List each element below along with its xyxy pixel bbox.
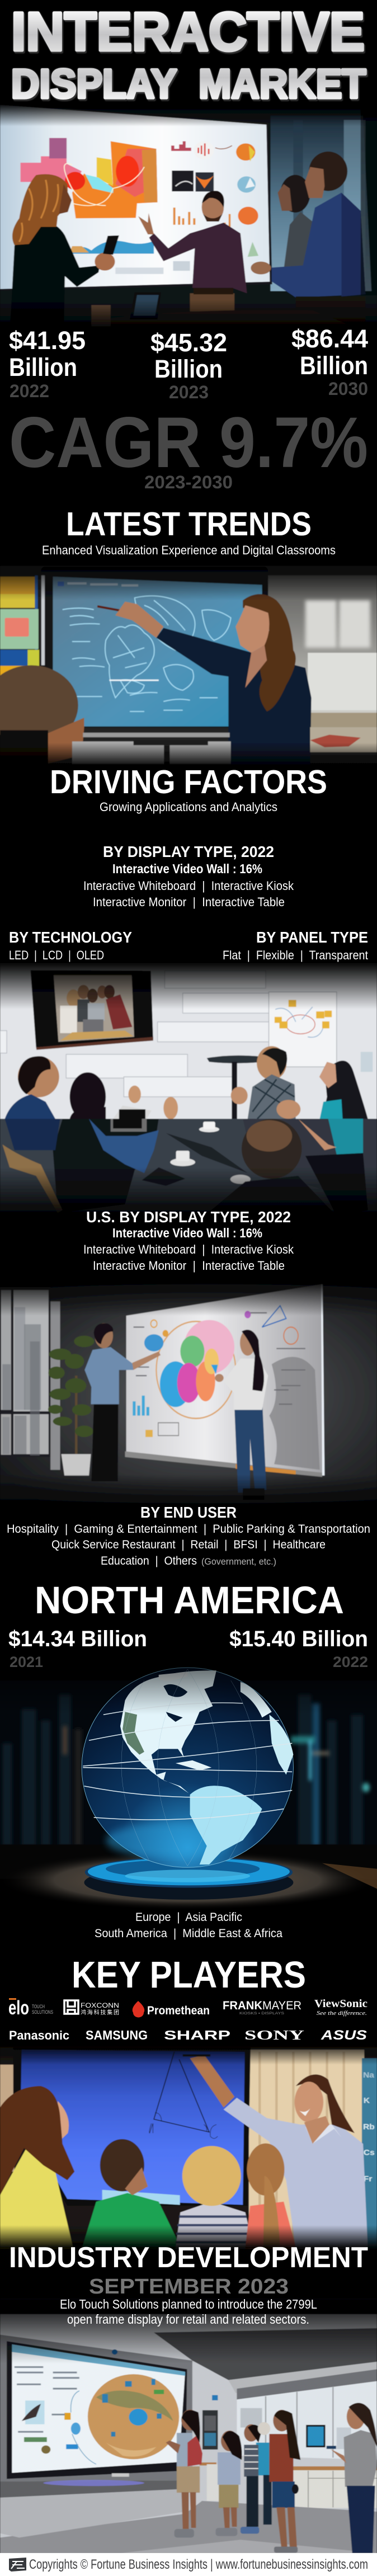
high table — [207, 1056, 258, 1119]
wall panels — [0, 971, 273, 1097]
value: $86.44 — [291, 324, 368, 353]
classroom posters — [0, 576, 39, 683]
list row 2: Interactive Monitor | Interactive Table — [93, 895, 285, 909]
presenter: woman with phone — [10, 174, 119, 336]
development description — [60, 2297, 317, 2327]
presenter: man in purple shirt — [138, 191, 247, 312]
logo: sony: SONY — [244, 2028, 304, 2043]
data-centre backdrop — [0, 1680, 377, 1846]
title line 1: INTERACTIVE — [11, 1, 365, 62]
logo: samsung: SAMSUNG — [86, 2028, 148, 2042]
counter and monitor — [200, 2425, 377, 2508]
stats: market size 2030 — [291, 324, 368, 399]
segment: by technology — [9, 929, 132, 962]
heading: latest trends: LATEST TRENDS — [66, 506, 312, 543]
logo: viewsonic — [314, 1998, 367, 2017]
city window — [0, 1287, 60, 1470]
table with tablet — [91, 292, 377, 336]
board with triangle — [21, 2050, 245, 2205]
viewers: two men — [251, 152, 365, 336]
photo: video meeting room — [0, 962, 377, 1216]
attendees: man in navy, woman with tablet — [5, 1056, 178, 1121]
segment: U.S. by display type — [83, 1208, 294, 1273]
logo: promethean: Promethean — [147, 2004, 210, 2017]
list row 1: Interactive Whiteboard | Interactive Kiosk — [83, 1242, 294, 1256]
globe — [82, 1668, 293, 1867]
logo: viewsonic: See the difference. — [317, 2010, 367, 2017]
photo: teacher at digital whiteboard — [0, 558, 377, 767]
footer logo — [9, 2558, 26, 2572]
logo: promethean — [133, 2001, 210, 2017]
wall kiosk — [202, 2395, 218, 2450]
logo: frankmayer — [223, 1999, 301, 2015]
segment heading: BY DISPLAY TYPE, 2022 — [103, 843, 274, 860]
man pointing — [84, 1323, 161, 1481]
photo: pupils at interactive display — [0, 2299, 377, 2554]
heading: BY TECHNOLOGY — [9, 929, 132, 946]
logo: elo — [8, 1997, 53, 2019]
logo: elo: elo — [8, 1997, 29, 2019]
pupil in green — [82, 2139, 182, 2249]
leading value: Interactive Video Wall : 16% — [112, 861, 262, 876]
logo: frankmayer: FRANK — [223, 1999, 262, 2012]
globe on display — [15, 2367, 179, 2464]
segment: by display type — [83, 843, 294, 909]
periodic table poster: Fr — [364, 2175, 373, 2184]
logo: panasonic: Panasonic — [9, 2028, 69, 2042]
children and adult viewers — [166, 2403, 377, 2553]
row 2: South America | Middle East & Africa — [95, 1927, 282, 1940]
value: $15.40 Billion — [229, 1627, 368, 1651]
leading value: Interactive Video Wall : 16% — [112, 1226, 262, 1240]
other regions — [95, 1911, 282, 1940]
title — [11, 1, 366, 107]
unit: Billion — [9, 353, 77, 382]
logo: foxconn: 鸿海科技集团 — [81, 2009, 119, 2016]
desk — [72, 727, 377, 765]
stat: north america 2021 — [8, 1627, 147, 1670]
stat: north america 2022 — [229, 1627, 368, 1670]
logo: sharp: SHARP — [164, 2028, 230, 2042]
CAGR period: 2023-2030 — [144, 472, 233, 492]
ceiling — [154, 2328, 377, 2380]
value: $14.34 Billion — [8, 1627, 147, 1651]
list row 1: Interactive Whiteboard | Interactive Kiosk — [83, 879, 294, 893]
whiteboard with sticky notes — [269, 992, 337, 1067]
table items — [142, 1122, 251, 1186]
dashboard charts — [70, 142, 258, 274]
heading: industry development: INDUSTRY DEVELOPMENT — [9, 2241, 368, 2274]
heading: U.S. BY DISPLAY TYPE, 2022 — [86, 1208, 291, 1226]
value: $45.32 — [150, 328, 227, 357]
year: 2022 — [10, 381, 49, 401]
pupil in yellow — [0, 2086, 74, 2249]
logo: viewsonic: ViewSonic — [314, 1998, 367, 2010]
pupil with ponytail — [245, 2144, 296, 2249]
list row 2: Interactive Monitor | Interactive Table — [93, 1259, 285, 1273]
periodic table poster: K — [364, 2097, 370, 2105]
logo: elo: TOUCH — [32, 2004, 45, 2009]
year: 2023 — [169, 382, 209, 402]
periodic table poster: Cs — [364, 2149, 375, 2157]
photo: teacher with pupils — [0, 2041, 377, 2249]
heading: driving factors: DRIVING FACTORS — [50, 764, 327, 800]
unit: Billion — [300, 351, 368, 380]
list row 3: Education | Others — [101, 1555, 197, 1567]
footer — [0, 2553, 377, 2576]
subtitle: driving factors: Growing Applications and Analytics — [100, 800, 277, 814]
windows — [237, 2369, 377, 2460]
stats: market size 2022 — [9, 326, 86, 401]
logo: frankmayer: KIOSKS ▪ DISPLAYS — [239, 2012, 285, 2015]
glowing floor — [0, 1844, 377, 1910]
student head — [0, 665, 84, 765]
periodic table poster — [363, 2071, 375, 2184]
potted plant — [48, 1336, 95, 1476]
year: 2030 — [328, 379, 368, 399]
logo: foxconn — [64, 2000, 119, 2016]
pupils — [0, 2086, 296, 2249]
photo: team at data wall — [0, 103, 377, 338]
subtitle: latest trends: Enhanced Visualization Experience and Digital Classrooms — [42, 543, 336, 557]
heading: BY END USER — [140, 1504, 237, 1521]
row 1: Europe | Asia Pacific — [135, 1911, 242, 1924]
line 1: Elo Touch Solutions planned to introduce the 2799L — [60, 2297, 317, 2311]
child one — [166, 2410, 202, 2537]
list row 1: Hospitality | Gaming & Entertainment | Public Parking & Transportation — [7, 1523, 370, 1536]
continents — [120, 1670, 293, 1864]
line 2: open frame display for retail and related sectors. — [67, 2312, 309, 2327]
list row 3 — [101, 1555, 276, 1567]
photo: holographic globe — [0, 1663, 377, 1910]
floor — [0, 2501, 377, 2553]
pupil in stripes — [176, 2146, 253, 2249]
year: 2022 — [333, 1654, 368, 1670]
segment: by panel type — [223, 929, 368, 962]
heading: key players: KEY PLAYERS — [72, 1954, 306, 1996]
segment: by end user — [7, 1504, 370, 1567]
logo: frankmayer: MAYER — [262, 1999, 301, 2012]
title line 2: DISPLAY MARKET — [11, 62, 366, 107]
heading: north america: NORTH AMERICA — [35, 1579, 344, 1622]
periodic table poster: Rb — [363, 2123, 375, 2131]
logo: foxconn: FOXCONN — [81, 2002, 119, 2009]
value: $41.95 — [9, 326, 86, 355]
periodic table poster: Na — [363, 2071, 375, 2080]
key player logos — [8, 1997, 367, 2043]
note: (Government, etc.) — [201, 1556, 276, 1567]
globe pedestal — [84, 1857, 293, 1900]
child five — [269, 2410, 300, 2553]
wall TV — [31, 970, 153, 1050]
year: 2021 — [10, 1654, 43, 1670]
child three and four — [241, 2422, 272, 2533]
logo: asus: ASUS — [321, 2028, 367, 2043]
map drawn on whiteboard — [63, 596, 231, 712]
adult woman — [327, 2403, 377, 2553]
stats: market size 2023 — [150, 328, 227, 402]
teacher — [115, 594, 312, 765]
unit: Billion — [154, 355, 223, 383]
child two — [216, 2431, 242, 2536]
heading: BY PANEL TYPE — [256, 929, 368, 946]
list: LED | LCD | OLED — [9, 948, 104, 962]
photo: collaborators at wall-sized whiteboard — [0, 1279, 377, 1508]
teacher — [183, 2054, 368, 2249]
data map on wall — [21, 138, 158, 218]
display wall unit — [0, 2335, 192, 2537]
logo: elo: SOLUTIONS — [32, 2009, 53, 2015]
development date: SEPTEMBER 2023 — [89, 2275, 289, 2299]
woman with tablet — [211, 1330, 268, 1500]
back-of-room attendees — [2, 1119, 368, 1216]
attendees: man in plaid, woman in teal — [231, 1046, 368, 1119]
list row 2: Quick Service Restaurant | Retail | BFSI | Healthcare — [51, 1538, 326, 1551]
whiteboard content — [125, 1284, 324, 1477]
